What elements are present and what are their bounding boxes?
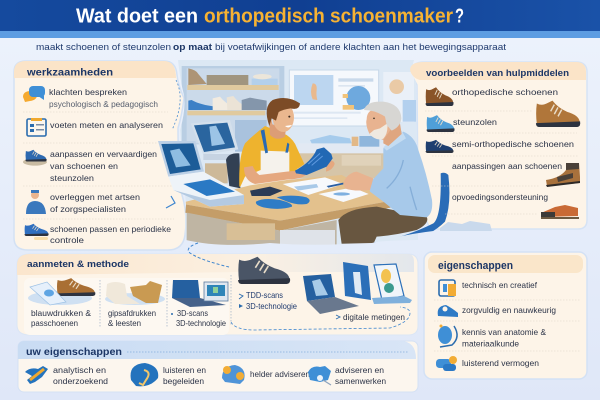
shelving with shoes and boxes bbox=[182, 66, 284, 152]
trait: zorgvuldig en nauwkeurig: zorgvuldig en nauwkeurig bbox=[462, 305, 556, 315]
item: aanpassen en vervaardigen bbox=[23, 149, 157, 183]
devices: laptop, foot scan, foot map bbox=[303, 262, 412, 314]
panel: voorbeelden van hulpmiddelen background bbox=[410, 62, 587, 229]
chair back bbox=[226, 153, 241, 188]
method: blauwdrukken bbox=[28, 278, 95, 328]
shoe: brown large bbox=[536, 101, 580, 127]
trait: helder adviseren bbox=[222, 365, 310, 384]
item: overleggen met artsen: overleggen met artsen bbox=[50, 192, 140, 202]
desk bbox=[179, 175, 392, 247]
heading: uw eigenschappen: uw eigenschappen bbox=[26, 347, 122, 358]
item: overleggen met artsen bbox=[26, 190, 140, 214]
heading: aanmeten & methode: aanmeten & methode bbox=[27, 258, 129, 269]
example: opvoedingsondersteuning bbox=[452, 192, 579, 219]
item: schoenen passen bbox=[24, 224, 171, 245]
item: klachten bespreken bbox=[23, 86, 158, 109]
method: gipsafdrukken: & leesten bbox=[108, 318, 141, 328]
client seated on a blue chair bbox=[338, 102, 449, 244]
list: TDD-scans and 3D-technologie bbox=[239, 290, 297, 311]
example: semi-orthopedische schoenen: semi-orthopedische schoenen bbox=[452, 139, 574, 149]
method: gipsafdrukken bbox=[105, 281, 165, 328]
heading: werkzaamheden: werkzaamheden bbox=[26, 68, 113, 78]
list: TDD-scans and 3D-technologie: TDD-scans bbox=[246, 290, 283, 300]
illustration: orthopedic workshop consultation bbox=[178, 60, 418, 245]
item: overleggen met artsen: of zorgspecialisten bbox=[50, 204, 126, 214]
trait: adviseren en samenwerken: samenwerken bbox=[335, 376, 386, 386]
trait: kennis van anatomie bbox=[438, 324, 546, 348]
panel: uw eigenschappen bbox=[18, 341, 418, 392]
example: orthopedische schoenen bbox=[426, 87, 558, 106]
trait: luisteren en begeleiden: begeleiden bbox=[163, 376, 204, 386]
trait: adviseren en samenwerken: adviseren en bbox=[335, 365, 384, 375]
papers bbox=[283, 177, 369, 202]
example: steunzolen bbox=[427, 115, 497, 132]
heading: voorbeelden van hulpmiddelen: voorbeelden van hulpmiddelen bbox=[426, 68, 569, 79]
wall monitor with charts bbox=[289, 70, 379, 126]
trait: technisch en creatief bbox=[439, 280, 538, 296]
item: aanpassen en vervaardigen: aanpassen en vervaardigen bbox=[50, 149, 157, 159]
trait: kennis van anatomie: materiaalkunde bbox=[462, 338, 519, 348]
method: 3D-scans bbox=[171, 280, 228, 328]
subtitle: bij voetafwijkingen of andere klachten aan het bewegingsapparaat bbox=[215, 42, 506, 52]
panel: werkzaamheden background bbox=[14, 61, 186, 250]
keyboard bbox=[250, 187, 283, 196]
trait: luisteren en begeleiden bbox=[131, 363, 206, 386]
list: TDD-scans and 3D-technologie: 3D-technologie bbox=[246, 301, 297, 311]
item: schoenen passen: controle bbox=[50, 235, 84, 245]
trait: luisteren en begeleiden: luisteren en bbox=[163, 365, 206, 375]
panel: eigenschappen bbox=[424, 252, 587, 379]
item: schoenen passen: schoenen passen en periodieke bbox=[50, 224, 171, 234]
trait: analytisch en onderzoekend: analytisch en bbox=[53, 365, 106, 375]
item: klachten bespreken: psychologisch & pedagogisch bbox=[49, 99, 158, 109]
trait: luisterend vermogen: luisterend vermogen bbox=[462, 358, 539, 368]
arrow: dashed loop around digital methods bbox=[231, 307, 410, 330]
title bbox=[76, 6, 464, 28]
subtitle: op maat bbox=[173, 42, 212, 52]
trait: luisterend vermogen bbox=[436, 356, 539, 371]
device: foot scanner bbox=[158, 141, 244, 207]
trait: zorgvuldig en nauwkeurig bbox=[438, 305, 556, 317]
panel: voorbeelden van hulpmiddelen bbox=[410, 62, 586, 231]
panel: aanmeten & methode bbox=[17, 243, 418, 335]
example: aanpassingen aan schoenen: aanpassingen aan schoenen bbox=[452, 161, 562, 171]
panel: werkzaamheden bbox=[14, 61, 180, 245]
arrow: dashed link from illustration to scans bbox=[188, 243, 229, 267]
back monitor bbox=[191, 120, 238, 183]
title: ? bbox=[455, 6, 464, 28]
title: orthopedisch schoenmaker bbox=[204, 6, 453, 28]
blue shoe in hands bbox=[295, 147, 333, 175]
title banner bbox=[0, 0, 600, 38]
item: klachten bespreken: klachten bespreken bbox=[49, 87, 127, 97]
subtitle bbox=[36, 42, 506, 52]
label: digitale metingen: digitale metingen bbox=[343, 312, 405, 322]
heading: eigenschappen: eigenschappen bbox=[438, 260, 513, 272]
trait: kennis van anatomie: kennis van anatomie & bbox=[462, 327, 546, 337]
example: semi-orthopedische schoenen bbox=[426, 139, 574, 153]
example: aanpassingen aan schoenen bbox=[452, 161, 580, 187]
title: Wat doet een bbox=[76, 6, 198, 28]
trait: technisch en creatief: technisch en creatief bbox=[462, 280, 538, 290]
method: blauwdrukken: blauwdrukken & bbox=[31, 308, 91, 318]
item: aanpassen en vervaardigen: steunzolen bbox=[50, 173, 94, 183]
trait: helder adviseren: helder adviseren bbox=[250, 369, 310, 379]
item: voeten meten en analyseren: voeten meten en analyseren bbox=[50, 120, 163, 130]
item: aanpassen en vervaardigen: van schoenen en bbox=[50, 161, 118, 171]
shoe: grey walking shoe bbox=[238, 257, 290, 284]
insoles on the desk bbox=[256, 196, 310, 209]
trait: adviseren en samenwerken bbox=[308, 365, 386, 386]
shoemaker bbox=[239, 98, 335, 187]
example: steunzolen: steunzolen bbox=[453, 117, 497, 127]
poster bbox=[383, 72, 416, 122]
subtitle: maakt schoenen of steunzolen bbox=[36, 42, 171, 52]
method: 3D-scans: 3D-technologie bbox=[176, 318, 226, 328]
method: blauwdrukken: passchoenen bbox=[31, 318, 78, 328]
trait: analytisch en onderzoekend: onderzoekend bbox=[53, 376, 108, 386]
example: orthopedische schoenen: orthopedische schoenen bbox=[452, 87, 558, 97]
method: gipsafdrukken: gipsafdrukken bbox=[108, 308, 156, 318]
trait: analytisch en onderzoekend bbox=[25, 365, 108, 386]
method: 3D-scans: 3D-scans bbox=[177, 308, 208, 318]
example: opvoedingsondersteuning: opvoedingsondersteuning bbox=[452, 192, 548, 202]
item: voeten meten en analyseren bbox=[27, 118, 163, 136]
